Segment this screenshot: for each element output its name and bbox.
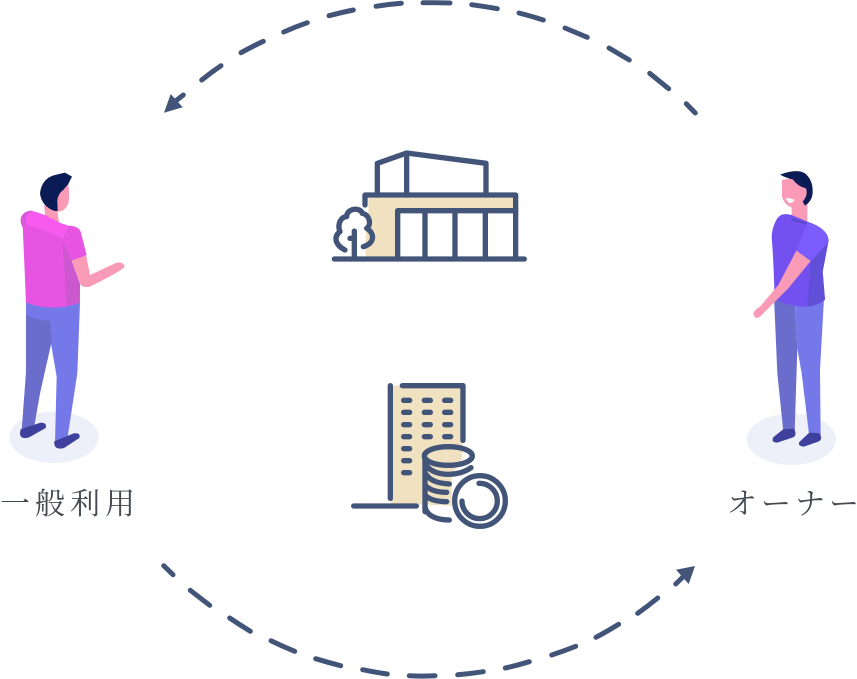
hair (40, 173, 72, 211)
neck (792, 202, 807, 223)
smile (786, 198, 795, 203)
hair (780, 171, 813, 206)
t-shirt (23, 223, 80, 308)
arrow: bottom dashed arc from general user to owner (164, 566, 695, 676)
trousers (22, 303, 80, 443)
neck and head (44, 205, 59, 224)
label: general user: 一般利用 (0, 488, 140, 521)
shoes (773, 429, 796, 443)
trousers (795, 298, 824, 437)
t-shirt (772, 214, 829, 307)
ground shadow (747, 414, 836, 465)
shoes (20, 423, 46, 438)
head (782, 177, 809, 208)
arrow: top dashed arc from owner to general user (164, 3, 695, 113)
arm (753, 251, 811, 318)
ground shadow (9, 412, 99, 463)
arms (72, 255, 125, 287)
person: general user (9, 173, 125, 463)
person: owner (747, 171, 836, 465)
icon: shop building with tree (334, 153, 524, 259)
icon: office tower with coins (354, 386, 505, 526)
